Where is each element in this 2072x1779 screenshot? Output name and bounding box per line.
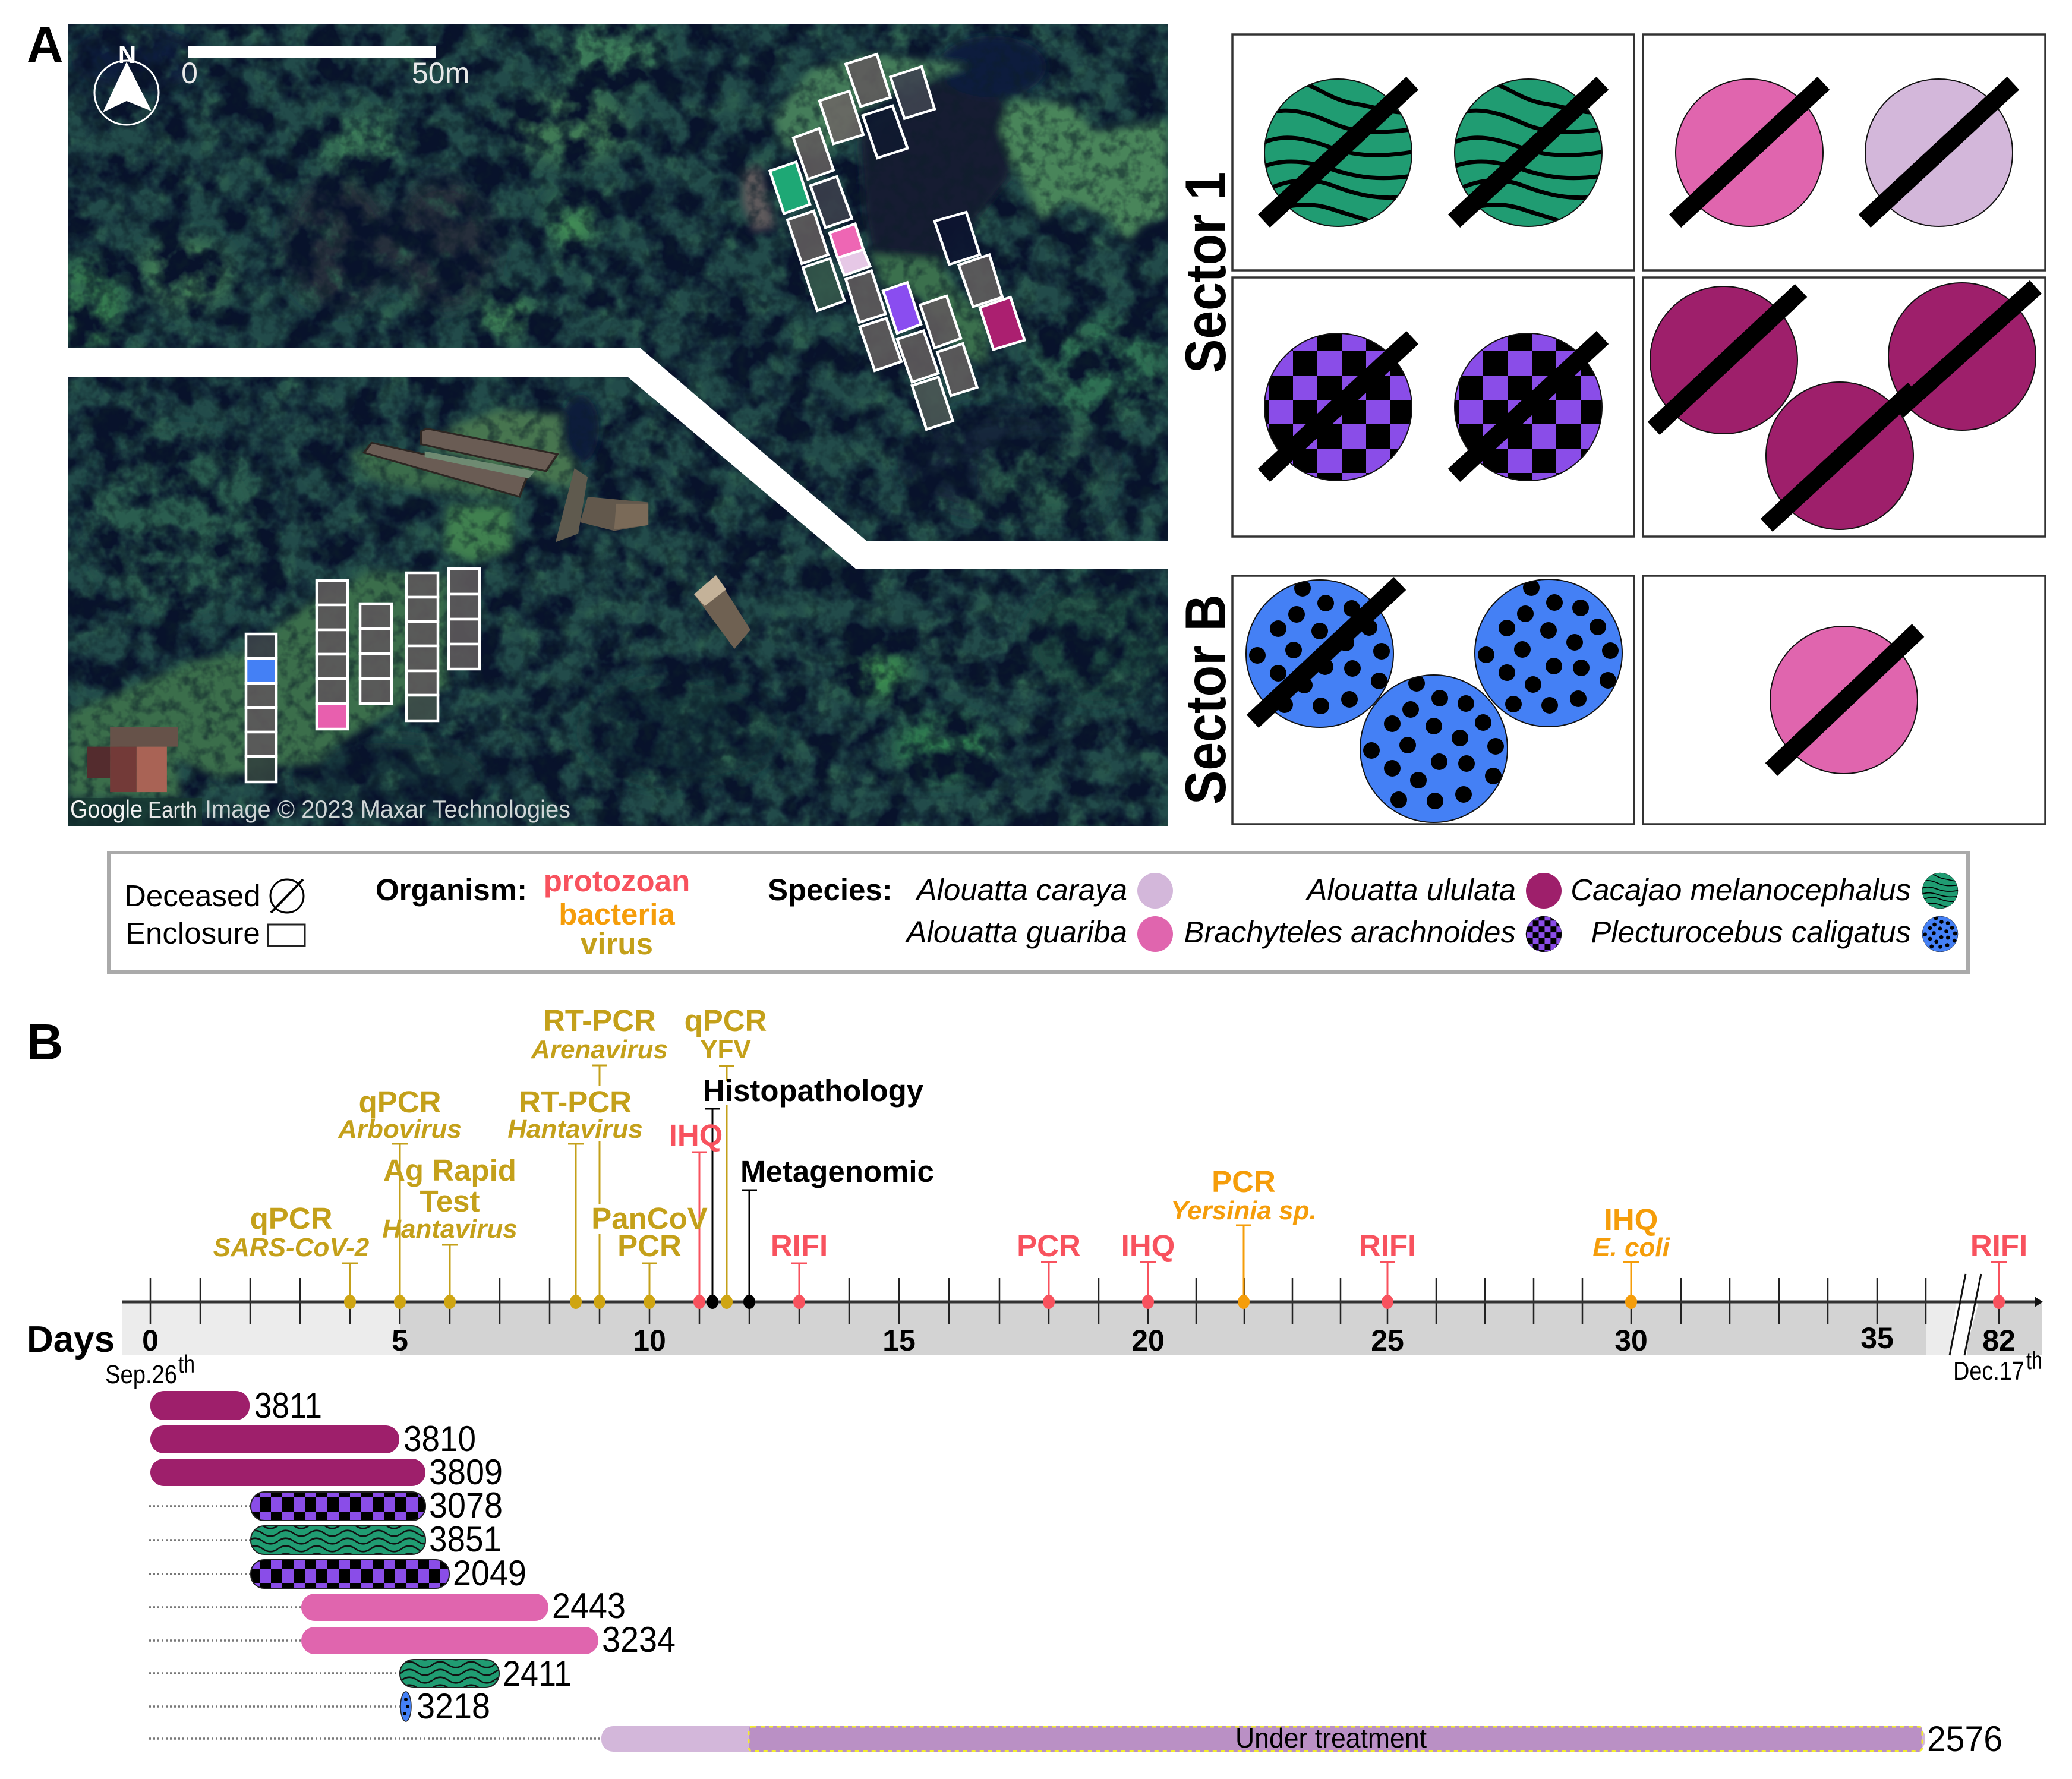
event dots <box>344 1295 2005 1309</box>
bar 2576 under treatment <box>601 1719 2002 1759</box>
individual duration bars <box>149 1386 2002 1759</box>
enclosures: sector B <box>246 569 480 782</box>
white divider band between sectors <box>68 348 1168 569</box>
bar 3218: 3218 <box>417 1686 490 1726</box>
panel: Sector B Plecturocebus caligatus <box>1232 576 1634 824</box>
legend: species: Brachyteles arachnoides <box>1184 915 1516 949</box>
event labels: Hantavirus <box>382 1215 518 1244</box>
bar 3811 <box>150 1386 322 1425</box>
event labels: PCR <box>617 1229 682 1263</box>
bar 2411 <box>400 1654 572 1693</box>
event labels: PCR <box>1212 1165 1276 1198</box>
event labels <box>213 1004 2027 1263</box>
event labels: qPCR <box>359 1085 441 1119</box>
legend: species <box>768 873 1959 952</box>
panel label B: B <box>27 1014 63 1071</box>
bar 3234 <box>301 1620 676 1660</box>
legend: deceased: Deceased <box>124 879 261 913</box>
legend: enclosure: Enclosure <box>125 916 260 950</box>
event labels: RIFI <box>771 1229 828 1263</box>
bar 2443 <box>301 1586 626 1626</box>
event labels: Yersinia sp. <box>1171 1196 1317 1225</box>
event labels: qPCR <box>685 1004 767 1037</box>
icon: north arrow: N <box>118 40 136 68</box>
event labels: RIFI <box>1359 1229 1416 1263</box>
event labels: RT-PCR <box>543 1004 656 1037</box>
panel: satellite map <box>53 19 1171 826</box>
end date <box>1953 1346 2042 1386</box>
start date: Sep.26 <box>105 1360 177 1389</box>
legend: species: Cacajao melanocephalus <box>1570 873 1911 907</box>
event labels: IHQ <box>1604 1203 1658 1237</box>
event labels: Arenavirus <box>531 1035 668 1064</box>
event labels: IHQ <box>1121 1229 1175 1263</box>
building: red roof <box>87 727 178 792</box>
bar 3851: 3851 <box>429 1519 502 1559</box>
event labels: Histopathology <box>703 1074 924 1108</box>
end date: th <box>2026 1346 2042 1374</box>
event labels: Metagenomic <box>740 1155 934 1188</box>
bar 2049: 2049 <box>453 1553 526 1593</box>
enclosures: sector 1 <box>770 54 1024 430</box>
bar 3234: 3234 <box>602 1620 676 1660</box>
legend: species: Alouatta ululata <box>1305 873 1516 907</box>
bar 3078: 3078 <box>429 1485 503 1525</box>
legend: organism: bacteria <box>559 897 675 931</box>
legend: organism: protozoan <box>544 864 690 898</box>
start date: th <box>178 1350 195 1378</box>
long roofs and service buildings <box>364 428 648 542</box>
event labels: IHQ <box>669 1118 723 1152</box>
bar 2576 under treatment: Under treatment <box>1235 1723 1427 1753</box>
sector 1 ground features <box>743 36 1168 365</box>
event labels: Arbovirus <box>338 1115 462 1144</box>
event labels: RIFI <box>1970 1229 2027 1263</box>
axis day numbers: 10 <box>633 1324 666 1357</box>
legend <box>109 853 1968 972</box>
bar 2576 under treatment: 2576 <box>1927 1719 2002 1759</box>
axis day numbers: 35 <box>1860 1321 1894 1355</box>
image credit: Earth <box>148 798 197 823</box>
dotted lead lines <box>149 1506 601 1739</box>
heading: Sector 1: Sector 1 <box>1174 172 1238 373</box>
legend: organism <box>376 864 690 961</box>
axis day numbers: 0 <box>142 1324 159 1357</box>
legend: species: Species: <box>768 873 892 907</box>
panel: Sector 1 Alouatta ululata <box>1643 277 2045 537</box>
axis day numbers: 82 <box>1982 1324 2016 1357</box>
event labels: YFV <box>700 1035 751 1064</box>
legend: species: Alouatta caraya <box>915 873 1127 907</box>
event labels: SARS-CoV-2 <box>213 1233 370 1262</box>
legend: species: Alouatta guariba <box>905 915 1127 949</box>
panel: Sector 1 Alouatta guariba and caraya <box>1643 34 2045 270</box>
axis title: Days <box>27 1319 115 1360</box>
axis day numbers: 25 <box>1371 1324 1404 1357</box>
sector B ground features <box>68 395 599 798</box>
shed <box>694 575 750 649</box>
axis day numbers: 30 <box>1614 1324 1648 1357</box>
legend: organism: Organism: <box>376 873 527 907</box>
panel: Sector 1 Cacajao melanocephalus <box>1232 34 1634 270</box>
bar 2411: 2411 <box>503 1654 572 1693</box>
event labels: qPCR <box>250 1201 332 1235</box>
start date <box>105 1350 195 1389</box>
event labels: Ag Rapid <box>383 1153 516 1187</box>
bar 3809 <box>150 1452 503 1492</box>
image credit: Google <box>70 795 143 823</box>
icon: north arrow <box>94 40 159 125</box>
panel: Sector B Alouatta guariba <box>1643 576 2045 824</box>
bar 3811: 3811 <box>254 1386 322 1425</box>
axis day numbers <box>142 1321 2016 1357</box>
event labels: Hantavirus <box>507 1115 643 1144</box>
panel label A: A <box>27 17 63 73</box>
scale bar <box>181 46 469 90</box>
bar 2443: 2443 <box>552 1586 626 1626</box>
legend: species: Plecturocebus caligatus <box>1591 915 1911 949</box>
canopy shading <box>68 24 1168 826</box>
event labels: RT-PCR <box>519 1085 632 1119</box>
bar 3809: 3809 <box>429 1452 503 1492</box>
axis day numbers: 15 <box>882 1324 916 1357</box>
bar 3851 <box>251 1519 502 1559</box>
event stems <box>342 1065 2007 1302</box>
panel: Sector 1 Brachyteles arachnoides <box>1232 277 1634 537</box>
bar 3810 <box>150 1419 476 1459</box>
scale bar: 0 <box>181 56 198 90</box>
bar 3078 <box>251 1485 503 1525</box>
bar 3810: 3810 <box>403 1419 476 1459</box>
timeline axis <box>122 1274 2043 1357</box>
axis day numbers: 20 <box>1131 1324 1165 1357</box>
event labels: Test <box>420 1184 480 1218</box>
image credit <box>68 795 570 826</box>
image credit: Image © 2023 Maxar Technologies <box>205 795 570 823</box>
event labels: E. coli <box>1592 1233 1670 1262</box>
heading: Sector B: Sector B <box>1174 594 1238 805</box>
bar 2049 <box>251 1553 526 1593</box>
event labels: PanCoV <box>591 1201 708 1235</box>
end date: Dec.17 <box>1953 1357 2024 1386</box>
legend: organism: virus <box>581 927 653 961</box>
axis day numbers: 5 <box>392 1324 408 1357</box>
event labels: PCR <box>1017 1229 1081 1263</box>
scale bar: 50m <box>412 56 469 90</box>
